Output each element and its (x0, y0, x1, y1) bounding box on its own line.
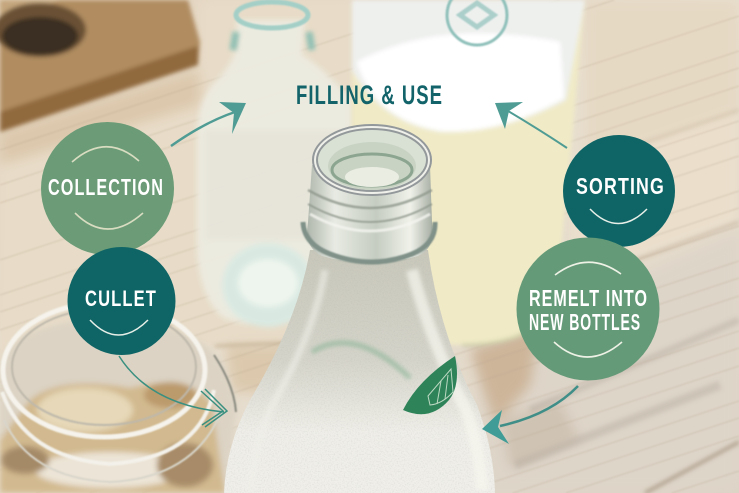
badge: sorting: SORTING (576, 173, 665, 199)
badge: collection: COLLECTION (48, 174, 164, 200)
badge: cullet: CULLET (85, 286, 157, 311)
badge: sorting (563, 135, 675, 247)
photo: blurred glass bottle behind (197, 20, 352, 327)
photo: cutting board with hole (0, 0, 200, 132)
badge: remelt into new bottles (516, 238, 660, 380)
photo: bottle logo stamp (447, 0, 507, 45)
arrow: cullet to bottle (119, 356, 227, 427)
badge: cullet (68, 247, 176, 355)
badge: collection (41, 122, 174, 255)
heading: filling and use: FILLING & USE (296, 80, 443, 110)
icon: green leaf label on bottle (403, 356, 457, 414)
badge: remelt into new bottles: REMELT INTO (529, 285, 648, 311)
photo: foreground glass bottle (224, 124, 495, 493)
arrow: remelt to bottle (482, 386, 578, 444)
arrow: collection to filling (171, 102, 246, 146)
arrow: sorting to filling (495, 102, 567, 148)
badge: remelt into new bottles: NEW BOTTLES (529, 309, 641, 335)
photo: milk bottle (352, 0, 585, 345)
photo: glass bottle lip (233, 2, 312, 50)
photo: jar of crushed cullet (0, 303, 237, 493)
